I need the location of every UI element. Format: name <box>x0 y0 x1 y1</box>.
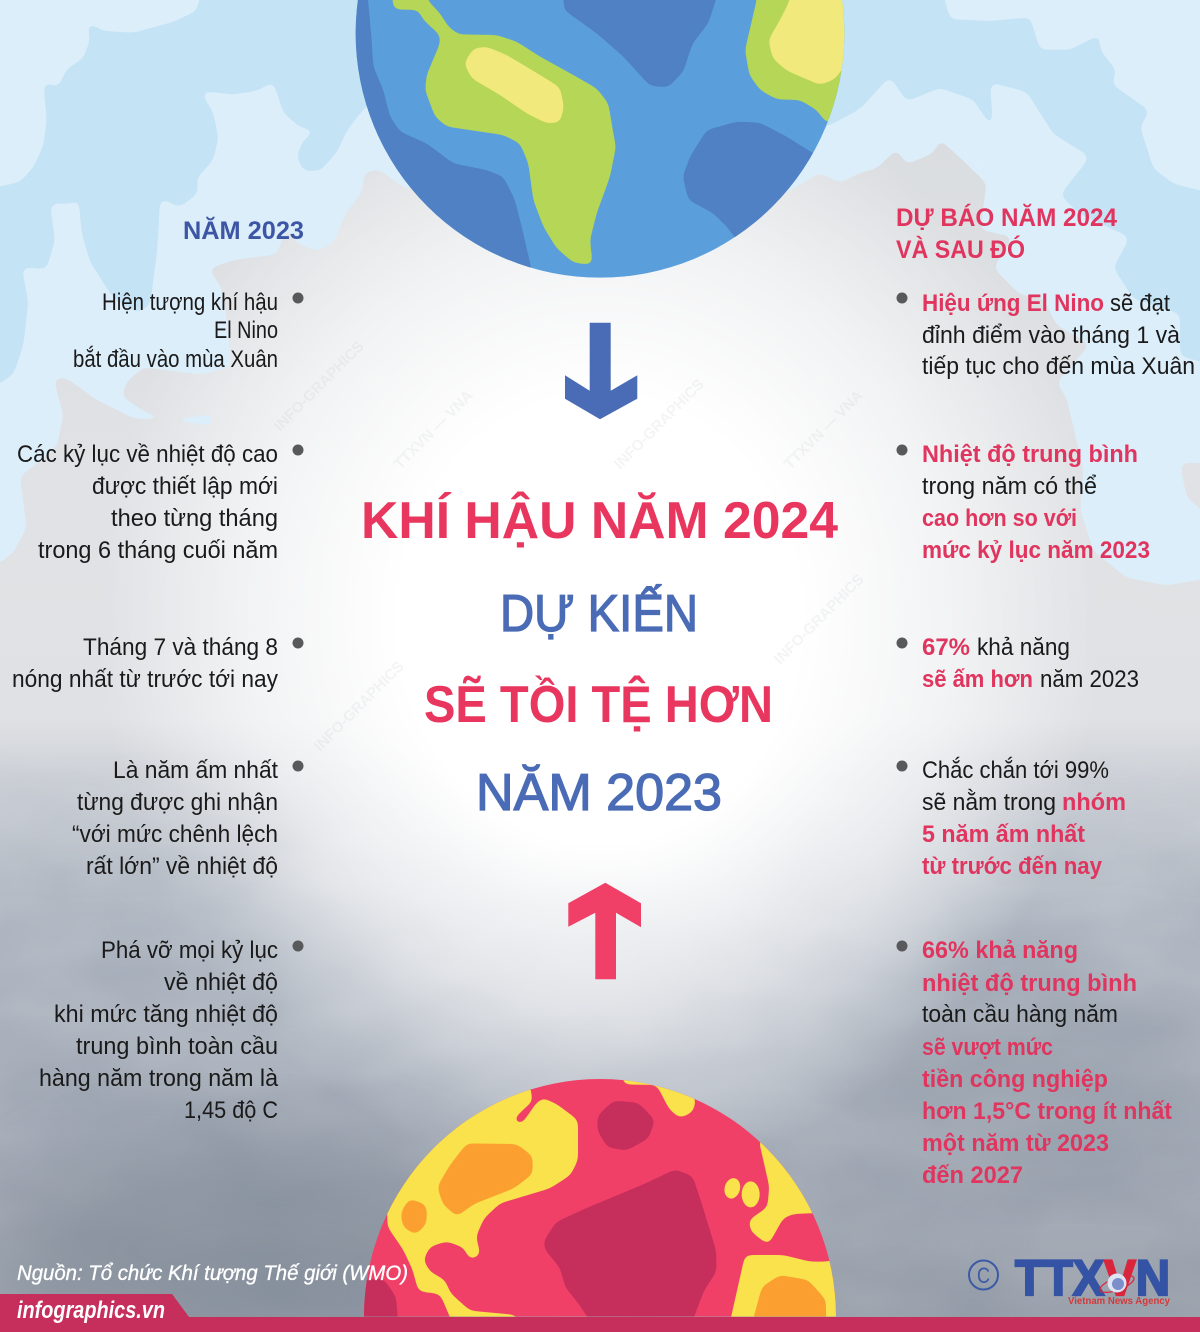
watermarks: TTXVN — VNA <box>391 387 477 473</box>
land: orange left <box>437 1143 533 1217</box>
forecast 1: Hiệu ứng El Nino <box>922 290 1104 317</box>
clouds: top left <box>0 0 500 582</box>
fact 1 <box>73 289 304 373</box>
right column: forecast <box>896 290 1195 1189</box>
land: orange small <box>401 1198 427 1235</box>
forecast 3: khả năng <box>977 634 1070 661</box>
forecast 5: sẽ vượt mức <box>922 1034 1053 1061</box>
fact 5: về nhiệt độ <box>164 969 278 996</box>
fact 4: Là năm ấm nhất <box>113 757 278 784</box>
fact 4 <box>72 757 304 880</box>
land: yellow left <box>387 1090 578 1316</box>
arrow: up red <box>568 883 641 979</box>
fact 4: từng được ghi nhận <box>77 789 278 816</box>
fact 2: theo từng tháng <box>111 505 278 532</box>
title <box>361 491 838 822</box>
forecast 1: đỉnh điểm vào tháng 1 và <box>922 322 1181 349</box>
fact 5: khi mức tăng nhiệt độ <box>54 1001 278 1028</box>
land: yellow right <box>750 1142 812 1242</box>
watermarks: INFO-GRAPHICS <box>611 376 708 473</box>
fact 3: nóng nhất từ trước tới nay <box>12 666 278 693</box>
tagline: Vietnam News Agency <box>1068 1296 1170 1307</box>
forecast 4: 5 năm ấm nhất <box>922 821 1085 848</box>
forecast 5: hơn 1,5°C trong ít nhất <box>922 1098 1172 1125</box>
forecast 4 <box>896 757 1126 880</box>
clouds: top right <box>707 0 1200 585</box>
ocean: dark right <box>684 122 814 237</box>
ocean: dark centre <box>562 0 727 87</box>
title: KHÍ HẬU NĂM 2024 <box>361 491 838 550</box>
watermarks: INFO-GRAPHICS <box>271 338 368 435</box>
land: yellow right <box>769 0 844 84</box>
fact 3 <box>12 634 304 693</box>
heading: forecast 2024: VÀ SAU ĐÓ <box>896 234 1025 264</box>
watermarks <box>271 338 868 755</box>
land: dark left edge <box>364 1279 398 1316</box>
fact 5: trung bình toàn cầu <box>76 1033 278 1060</box>
site name: infographics.vn <box>17 1297 165 1324</box>
arrow: down blue <box>565 323 637 419</box>
copyright mark: C <box>977 1263 990 1288</box>
land: green continent <box>390 0 616 265</box>
copyright mark <box>969 1260 998 1290</box>
fact 1: Hiện tượng khí hậu <box>102 289 278 316</box>
logo: TTXVN <box>969 1250 1170 1307</box>
forecast 2 <box>896 441 1150 564</box>
fact 5 <box>39 937 304 1124</box>
globe: cool blue earth <box>356 0 844 278</box>
watermarks: TTXVN — VNA <box>781 387 867 473</box>
fact 4: “với mức chênh lệch <box>72 821 278 848</box>
forecast 3: năm 2023 <box>1040 666 1139 693</box>
forecast 4: từ trước đến nay <box>922 853 1103 880</box>
forecast 2: trong năm có thể <box>922 473 1097 500</box>
land: yellow patch <box>464 47 564 123</box>
watermarks: INFO-GRAPHICS <box>311 658 408 755</box>
fact 1: bắt đầu vào mùa Xuân <box>73 346 278 373</box>
forecast 4: nhóm <box>1062 789 1126 816</box>
globe: hot red earth <box>364 1079 836 1317</box>
title: DỰ KIẾN <box>500 584 698 643</box>
forecast 5: 66% khả năng <box>922 937 1078 964</box>
forecast 3 <box>896 634 1139 693</box>
forecast 5: nhiệt độ trung bình <box>922 970 1137 997</box>
fact 4: rất lớn” về nhiệt độ <box>86 853 278 880</box>
fact 2: trong 6 tháng cuối năm <box>38 537 278 564</box>
left column: facts of 2023 <box>12 289 304 1124</box>
fact 1: El Nino <box>214 317 278 344</box>
source text: Nguồn: Tổ chức Khí tượng Thế giới (WMO) <box>17 1262 408 1285</box>
title: NĂM 2023 <box>476 764 722 822</box>
fact 5: Phá vỡ mọi kỷ lục <box>101 937 278 964</box>
heading: forecast 2024: DỰ BÁO NĂM 2024 <box>896 203 1117 232</box>
footer band <box>0 1294 1200 1332</box>
forecast 4: Chắc chắn tới 99% <box>922 757 1109 784</box>
watermarks: INFO-GRAPHICS <box>771 571 868 668</box>
forecast 2: Nhiệt độ trung bình <box>922 441 1138 468</box>
forecast 5: đến 2027 <box>922 1162 1023 1189</box>
forecast 1: sẽ đạt <box>1110 290 1170 317</box>
fact 3: Tháng 7 và tháng 8 <box>83 634 278 661</box>
land: yellow bottom right <box>731 1255 836 1316</box>
land: green right <box>746 0 844 122</box>
forecast 5 <box>896 937 1172 1189</box>
globe mark <box>1098 1272 1136 1296</box>
forecast 5: một năm từ 2023 <box>922 1130 1109 1157</box>
land: yellow ovals <box>724 1178 740 1198</box>
ocean: dark left <box>356 0 531 268</box>
heading: year 2023: NĂM 2023 <box>183 216 304 245</box>
forecast 1: tiếp tục cho đến mùa Xuân <box>922 353 1195 380</box>
forecast 4: sẽ nằm trong <box>922 789 1056 816</box>
land: orange bottom right <box>754 1276 826 1316</box>
fact 5: 1,45 độ C <box>184 1097 278 1124</box>
land: dark circle <box>597 1101 655 1151</box>
heading: forecast 2024 <box>896 203 1117 264</box>
forecast 5: tiền công nghiệp <box>922 1066 1108 1093</box>
fact 2: được thiết lập mới <box>92 473 278 500</box>
forecast 2: cao hơn so với <box>922 505 1077 532</box>
forecast 1 <box>896 290 1195 380</box>
land: dark central <box>544 1170 716 1316</box>
forecast 5: toàn cầu hàng năm <box>922 1001 1118 1028</box>
fact 5: hàng năm trong năm là <box>39 1065 279 1092</box>
fact 2: Các kỷ lục về nhiệt độ cao <box>17 441 278 468</box>
forecast 2: mức kỷ lục năm 2023 <box>922 537 1150 564</box>
title: SẼ TỒI TỆ HƠN <box>424 675 773 734</box>
land: yellow top <box>623 1080 695 1116</box>
fact 2 <box>17 441 304 564</box>
wordmark: TTXVN <box>1015 1250 1170 1306</box>
forecast 3: 67% <box>922 634 970 661</box>
forecast 3: sẽ ấm hơn <box>922 666 1033 693</box>
